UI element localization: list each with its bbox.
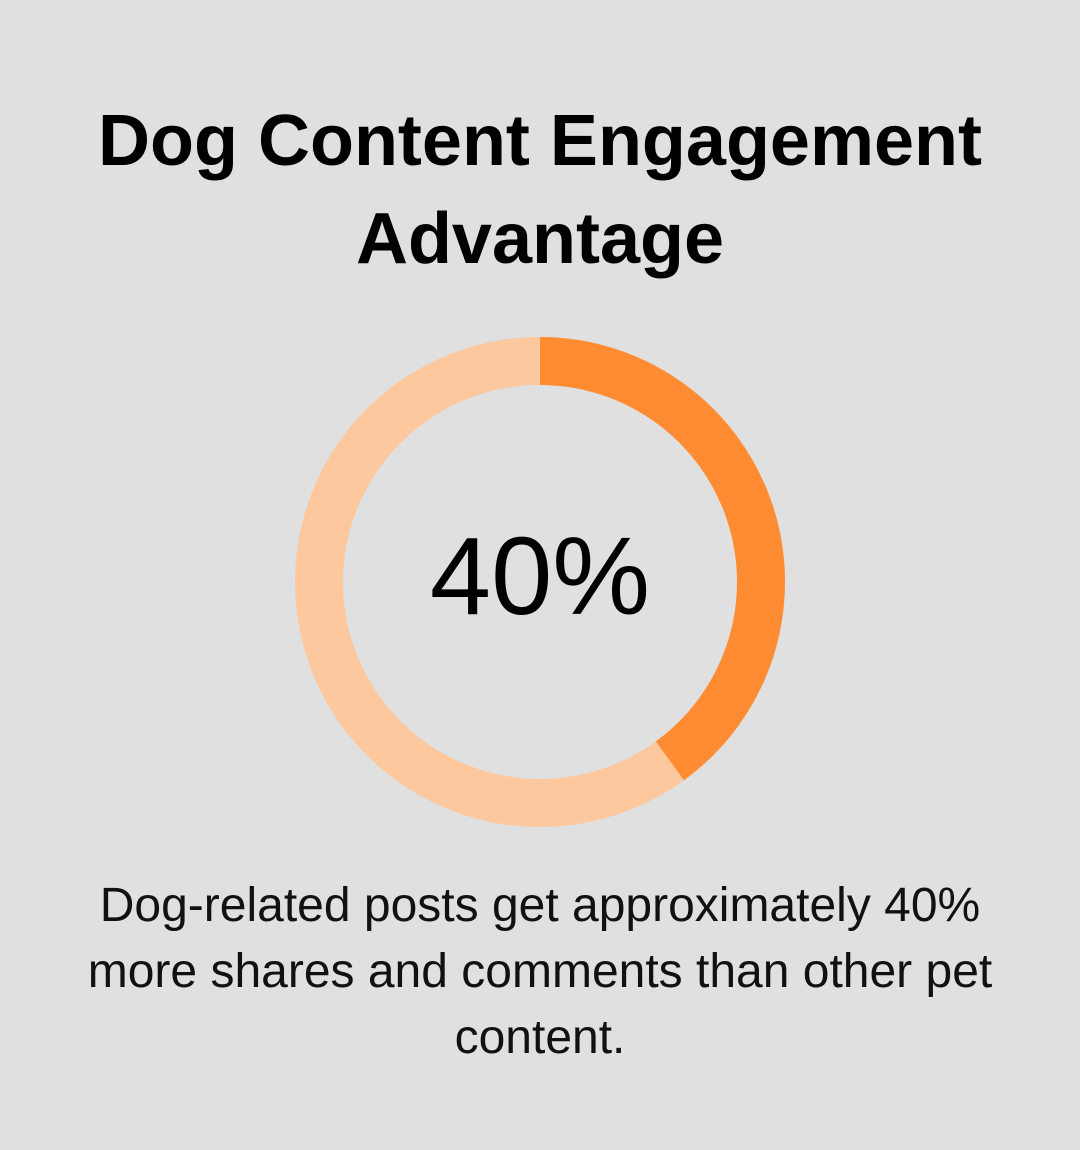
ring: remainder (319, 361, 761, 803)
description text: Dog-related posts get approximately 40% (100, 879, 980, 932)
description text (88, 879, 992, 1064)
center value: 40% (430, 515, 650, 638)
title: Dog Content Engagement (98, 101, 982, 181)
title: Advantage (356, 199, 724, 279)
description text: more shares and comments than other pet (88, 945, 992, 998)
description text: content. (455, 1011, 625, 1064)
title (98, 101, 982, 279)
ring: 40% segment (540, 361, 761, 761)
